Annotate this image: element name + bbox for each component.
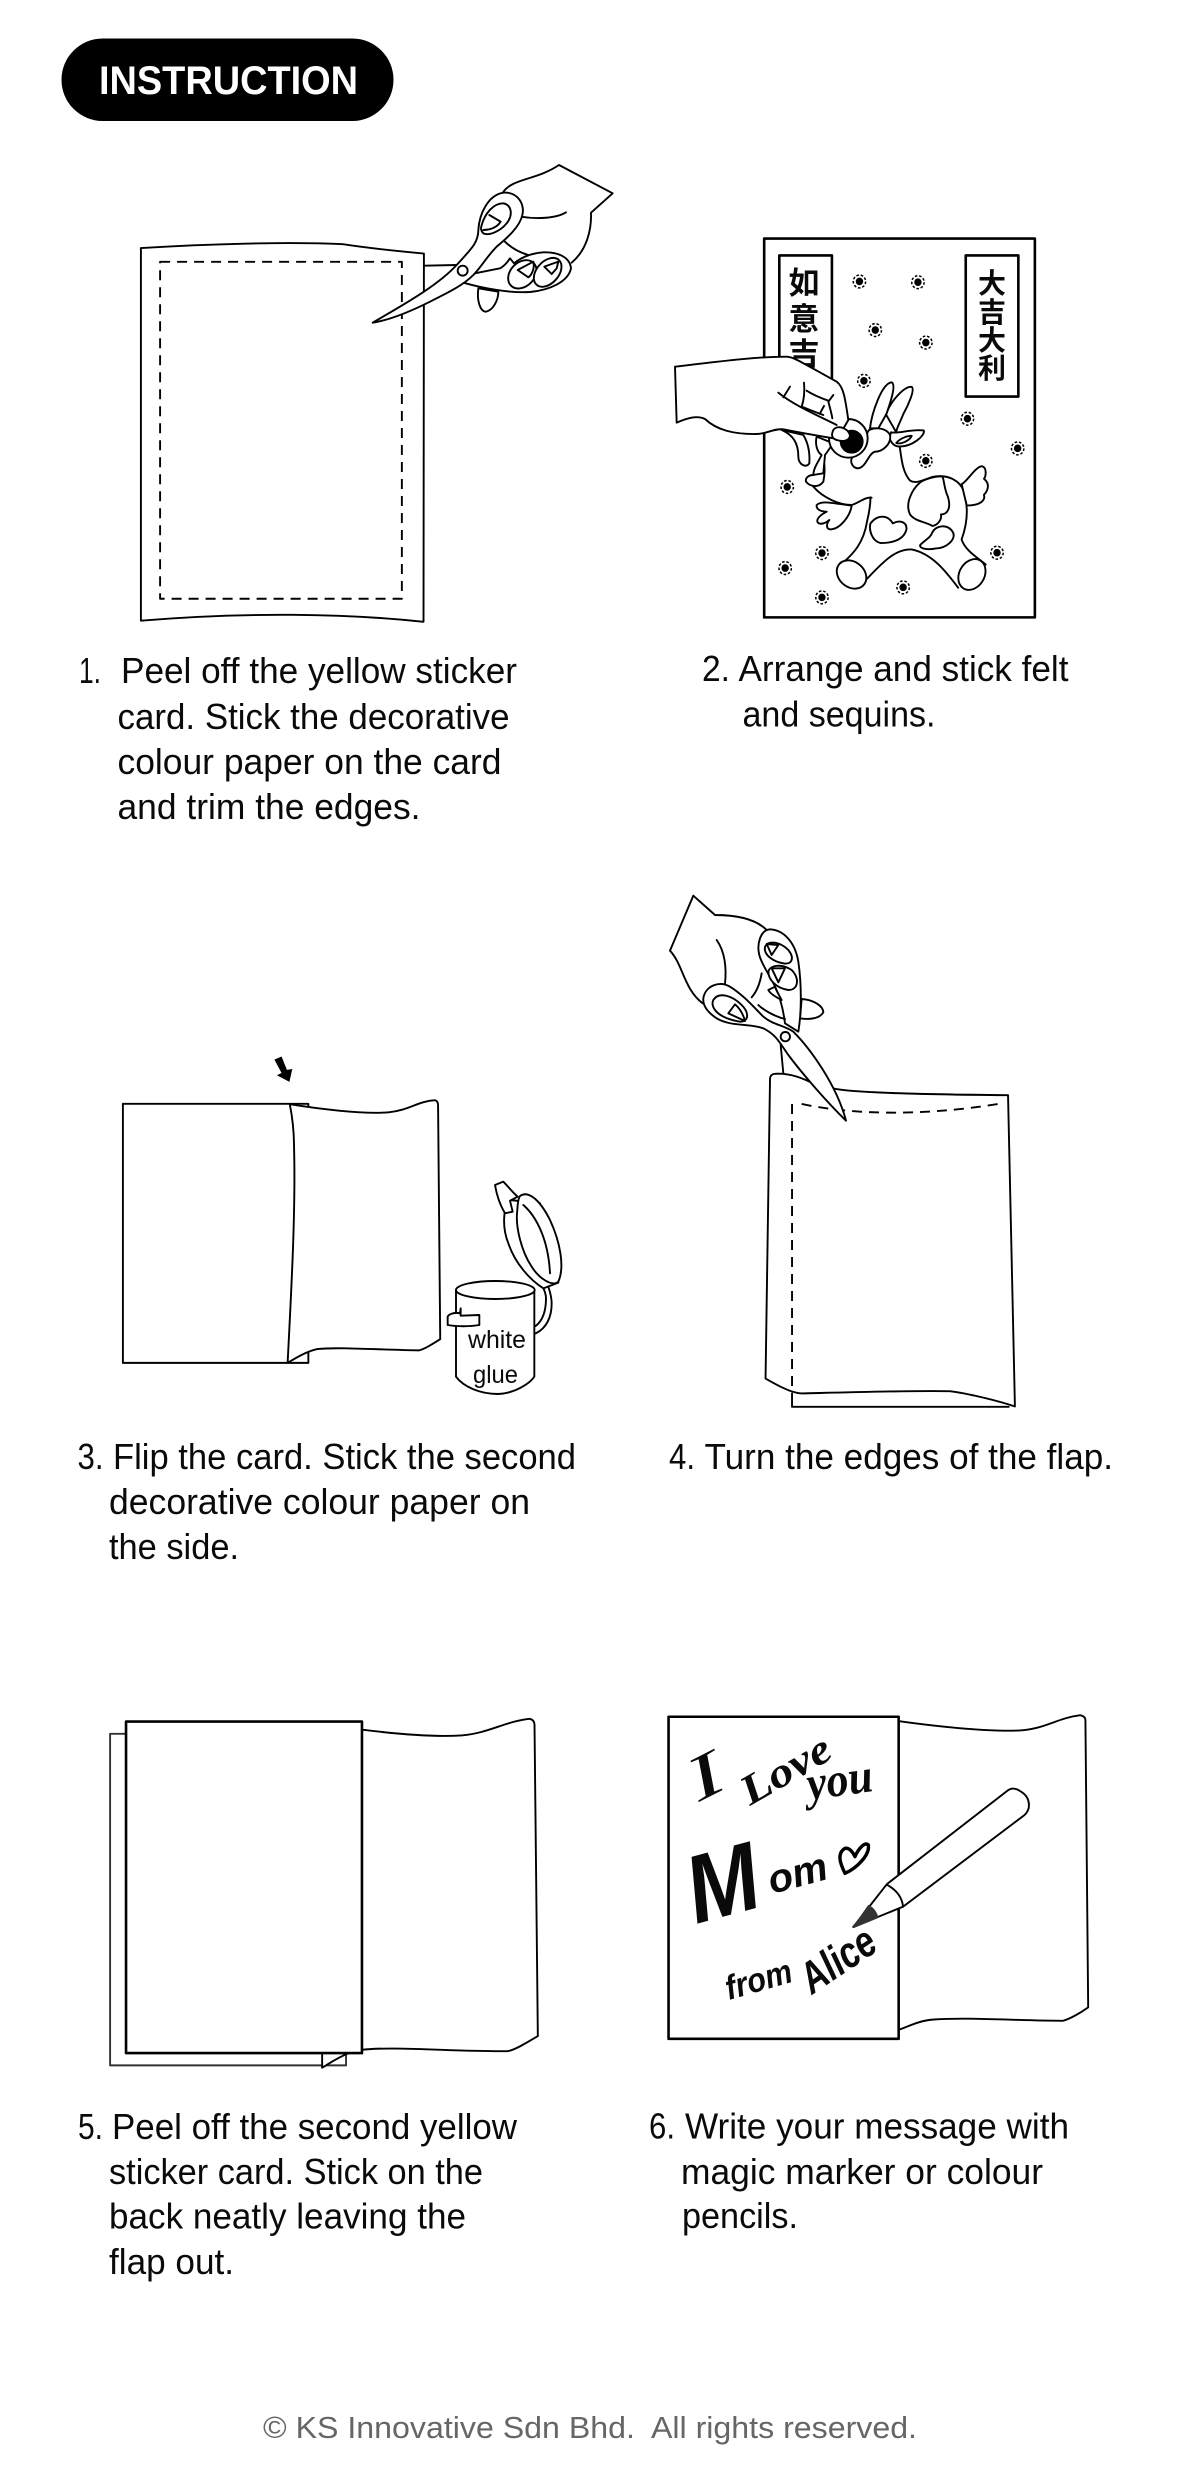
panel: step 6 bbox=[649, 1715, 1088, 2236]
back sheet bbox=[110, 1734, 346, 2065]
sequin eye bbox=[829, 419, 868, 458]
step 2 text: Arrange and stick felt bbox=[738, 648, 1068, 689]
panel: step 5 bbox=[78, 1719, 538, 2282]
hand bbox=[675, 357, 850, 441]
hand bbox=[670, 896, 823, 1019]
step 6 text: pencils. bbox=[682, 2195, 798, 2236]
handwritten message: om bbox=[763, 1845, 832, 1903]
step 6 text: 6. bbox=[649, 2106, 675, 2146]
back sheet bbox=[792, 1393, 1009, 1407]
step 5 text: back neatly leaving the bbox=[109, 2196, 466, 2236]
panel: step 1 bbox=[79, 165, 613, 827]
step 1 text: card. Stick the decorative bbox=[118, 696, 510, 737]
step 1 text: colour paper on the card bbox=[118, 741, 502, 782]
card front bbox=[669, 1717, 899, 2039]
illustration: flap bbox=[123, 1056, 440, 1363]
handwritten message bbox=[673, 1726, 886, 2008]
step 1 text: and trim the edges. bbox=[118, 786, 420, 827]
glue jar label: glue bbox=[473, 1361, 518, 1389]
step 5 text: flap out. bbox=[109, 2241, 234, 2282]
scissors bbox=[373, 193, 571, 323]
step 1 text: 1. bbox=[79, 650, 101, 691]
handwritten message: you bbox=[799, 1749, 876, 1812]
front card bbox=[126, 1722, 362, 2053]
illustration: hand with scissors bbox=[670, 896, 846, 1121]
step 6 text: Write your message with bbox=[685, 2106, 1069, 2146]
panel: step 4 bbox=[669, 896, 1113, 1477]
step 6 text bbox=[649, 2106, 1069, 2236]
illustration: goat head and hand placing sequin bbox=[675, 357, 893, 529]
card back bbox=[123, 1104, 308, 1363]
glue jar label: white bbox=[467, 1326, 526, 1354]
left banner characters: 吉 bbox=[788, 337, 820, 372]
panel: step 3 bbox=[78, 1056, 576, 1567]
white glue jar bbox=[448, 1182, 561, 1394]
step 3 text bbox=[78, 1436, 576, 1567]
flap bbox=[897, 1715, 1088, 2030]
title pill bbox=[62, 38, 394, 121]
paper sheet outline bbox=[141, 243, 424, 622]
step 5 text: Peel off the second yellow bbox=[112, 2106, 518, 2147]
step 4 text: Turn the edges of the flap. bbox=[704, 1436, 1113, 1477]
step 2 text bbox=[702, 648, 1068, 734]
dashed cutting guide bbox=[160, 262, 402, 599]
heart bbox=[840, 1844, 868, 1873]
fingers behind bbox=[782, 430, 833, 475]
handwritten message: Love bbox=[731, 1726, 840, 1815]
right banner characters bbox=[978, 268, 1006, 384]
illustration: card and flap bbox=[669, 1715, 1088, 2039]
step 1 text: Peel off the yellow sticker bbox=[121, 650, 517, 691]
step 3 text: decorative colour paper on bbox=[109, 1481, 530, 1522]
dashed fold guides bbox=[792, 1104, 998, 1389]
left banner characters: 意 bbox=[788, 302, 820, 337]
right banner characters: 利 bbox=[978, 353, 1006, 384]
left banner characters bbox=[788, 266, 820, 372]
arrow bbox=[274, 1056, 292, 1082]
step 5 text: sticker card. Stick on the bbox=[109, 2151, 483, 2192]
handwritten message: from bbox=[721, 1952, 797, 2008]
title pill: INSTRUCTION bbox=[99, 59, 358, 103]
step 3 text: 3. bbox=[78, 1436, 104, 1477]
handwritten message: I bbox=[673, 1736, 741, 1815]
left banner characters: 如 bbox=[788, 266, 820, 301]
step 4 text: 4. bbox=[669, 1436, 695, 1477]
scissors bbox=[703, 929, 846, 1121]
illustration: sequins and goat body bbox=[779, 275, 1024, 604]
step 3 text: Flip the card. Stick the second bbox=[113, 1436, 576, 1477]
step 5 text bbox=[78, 2106, 518, 2282]
step 1 text bbox=[79, 650, 517, 827]
copyright footer: © KS Innovative Sdn Bhd. All rights reserved. bbox=[263, 2410, 917, 2445]
peeling corner bbox=[322, 2052, 348, 2068]
flap bbox=[360, 1719, 538, 2051]
felt goat body bbox=[831, 387, 991, 595]
decorative paper flap bbox=[288, 1100, 440, 1363]
panel: step 2 bbox=[675, 239, 1068, 734]
handwritten message: Alice bbox=[790, 1917, 886, 2004]
paper flap outline bbox=[766, 1074, 1015, 1406]
card outline bbox=[764, 239, 1035, 617]
handwritten message: M bbox=[674, 1822, 773, 1944]
illustration: paper flap bbox=[766, 1074, 1015, 1407]
right banner characters: 大 bbox=[978, 325, 1006, 356]
sequins bbox=[779, 275, 1024, 604]
step 3 text: the side. bbox=[109, 1526, 239, 1567]
illustration: hand with scissors bbox=[373, 165, 613, 323]
step 2 text: 2. bbox=[702, 648, 730, 689]
glue jar label bbox=[467, 1326, 526, 1389]
hand bbox=[424, 165, 613, 312]
step 5 text: 5. bbox=[78, 2106, 103, 2147]
illustration: goat card background bbox=[764, 239, 1035, 617]
goat head and ear bbox=[806, 382, 893, 529]
step 2 text: and sequins. bbox=[742, 694, 936, 734]
left banner frame bbox=[779, 255, 832, 379]
illustration: card back with flap bbox=[110, 1719, 538, 2068]
right banner characters: 吉 bbox=[978, 297, 1006, 328]
step 6 text: magic marker or colour bbox=[681, 2151, 1043, 2192]
illustration: paper sheet bbox=[141, 243, 424, 622]
pencil bbox=[853, 1789, 1029, 1927]
right banner characters: 大 bbox=[978, 268, 1006, 299]
right banner frame bbox=[966, 255, 1018, 397]
